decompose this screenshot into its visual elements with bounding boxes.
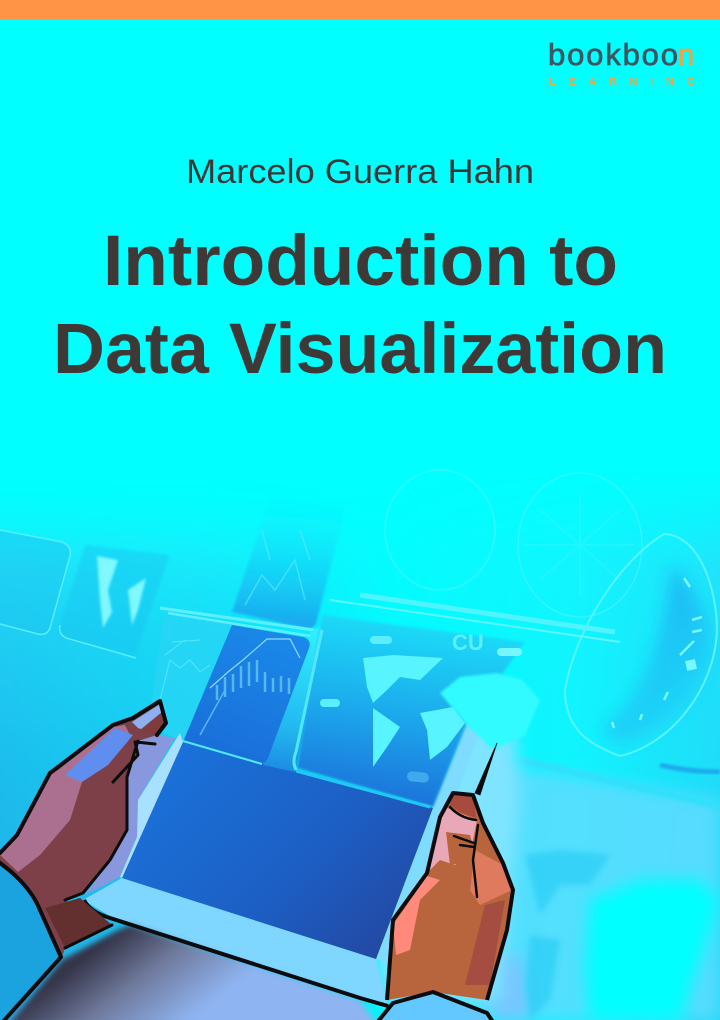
right sleeve — [375, 992, 495, 1020]
background dashboard artwork — [0, 470, 720, 1020]
world map — [363, 655, 540, 767]
tablet bottom edge — [84, 900, 388, 1006]
left glass chart — [148, 612, 232, 742]
bright gap between panels — [263, 622, 328, 772]
world map panel: CU — [452, 630, 484, 655]
logo: bookboon learning: n — [678, 37, 694, 72]
hand shadow on tablet — [85, 735, 175, 895]
logo: bookboon learning — [548, 37, 695, 88]
tablet lower screen — [122, 741, 433, 959]
left dashboard panels — [0, 530, 170, 658]
horizontal glow rails — [160, 595, 615, 632]
right edge of tablet frame — [376, 723, 478, 965]
title: Introduction to — [103, 222, 618, 301]
pale glass right of screen — [376, 720, 520, 1003]
logo: bookboon learning: bookboo — [548, 37, 678, 72]
right gauge — [565, 534, 717, 756]
left sleeve — [0, 858, 61, 1020]
tablet — [83, 600, 620, 1005]
floor shadow — [8, 925, 378, 1020]
title — [53, 222, 667, 389]
orange top bar — [0, 0, 720, 20]
gauge dials — [385, 470, 642, 617]
tablet frame — [83, 878, 388, 1005]
upper chart panel — [232, 492, 345, 628]
label chips — [370, 636, 392, 644]
left hand — [0, 701, 166, 957]
world map panel — [294, 600, 620, 807]
author name: Marcelo Guerra Hahn — [186, 153, 534, 191]
blue chart panel — [168, 613, 310, 764]
tablet left highlight — [120, 733, 183, 878]
right hand — [387, 793, 513, 1000]
logo: bookboon learning: LEARNING — [549, 76, 695, 88]
title: Data Visualization — [53, 310, 667, 389]
pointer stylus — [475, 743, 497, 795]
light right lower map area — [385, 760, 720, 1020]
